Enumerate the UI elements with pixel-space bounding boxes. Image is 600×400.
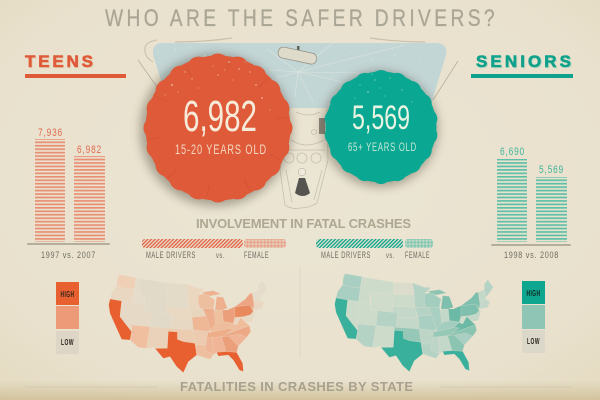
gender ratio: seniors: vs. (386, 251, 395, 260)
car interior illustration (138, 38, 458, 209)
windshield (153, 43, 446, 108)
airbag: teens (144, 54, 292, 202)
bar chart: seniors: 5,569 (539, 164, 564, 176)
legend: teens: HIGH (60, 290, 74, 299)
gender ratio: seniors: FEMALE (405, 250, 430, 260)
rear-view mirror (277, 46, 318, 65)
seniors heading: SENIORS (476, 52, 571, 71)
seniors number: 5,569 (352, 99, 410, 137)
windshield cracks (267, 43, 405, 102)
teens heading: TEENS (25, 52, 93, 71)
gender ratio: teens (142, 239, 286, 260)
teens heading (25, 52, 126, 78)
footer heading: fatalities in crashes by state: FATALITIES IN CRASHES BY STATE (180, 379, 413, 394)
teens age label: 15-20 YEARS OLD (175, 142, 267, 157)
map: seniors fatalities by state (335, 274, 493, 372)
windshield speckles (174, 46, 432, 76)
seniors heading (471, 52, 573, 78)
seniors heading: SENIORS (477, 53, 572, 72)
title: WHO ARE THE SAFER DRIVERS? (105, 4, 495, 32)
bar chart: seniors: 6,690 (500, 146, 525, 158)
bar chart: teens: 7,936 (38, 127, 63, 139)
gender ratio: teens: MALE DRIVERS (146, 250, 196, 260)
seniors age label: 65+ YEARS OLD (348, 140, 417, 154)
bar chart: teens: 1997 vs. 2007 (41, 250, 96, 260)
balloon shadows (140, 54, 438, 206)
gender ratio: teens: vs. (216, 251, 225, 260)
airbag speckles (354, 74, 412, 102)
airbag: seniors (323, 70, 439, 184)
bar chart: seniors: 1998 vs. 2008 (504, 250, 559, 260)
legend: teens: LOW (61, 338, 74, 347)
legend: seniors: HIGH (526, 289, 540, 298)
teens number: 6,982 (183, 92, 257, 141)
legend: teens (56, 282, 79, 354)
bar chart: teens: 6,982 (77, 144, 102, 156)
gear shifter (295, 168, 310, 196)
airbag speckles (164, 55, 270, 110)
legend: seniors: LOW (527, 337, 540, 346)
map: teens fatalities by state (109, 275, 267, 373)
gender ratio: teens: FEMALE (244, 250, 269, 260)
bar chart: teens (27, 127, 110, 260)
legend: seniors (522, 281, 545, 353)
gender ratio: seniors (316, 239, 433, 260)
heading: involvement in fatal crashes: INVOLVEMENT IN FATAL CRASHES (196, 216, 411, 231)
barcode sticker (319, 118, 325, 134)
airbag folds (149, 59, 287, 197)
teens heading: TEENS (26, 53, 94, 72)
dashboard outlines (138, 38, 458, 209)
bar chart: seniors (491, 146, 571, 260)
gender ratio: seniors: MALE DRIVERS (321, 250, 371, 260)
